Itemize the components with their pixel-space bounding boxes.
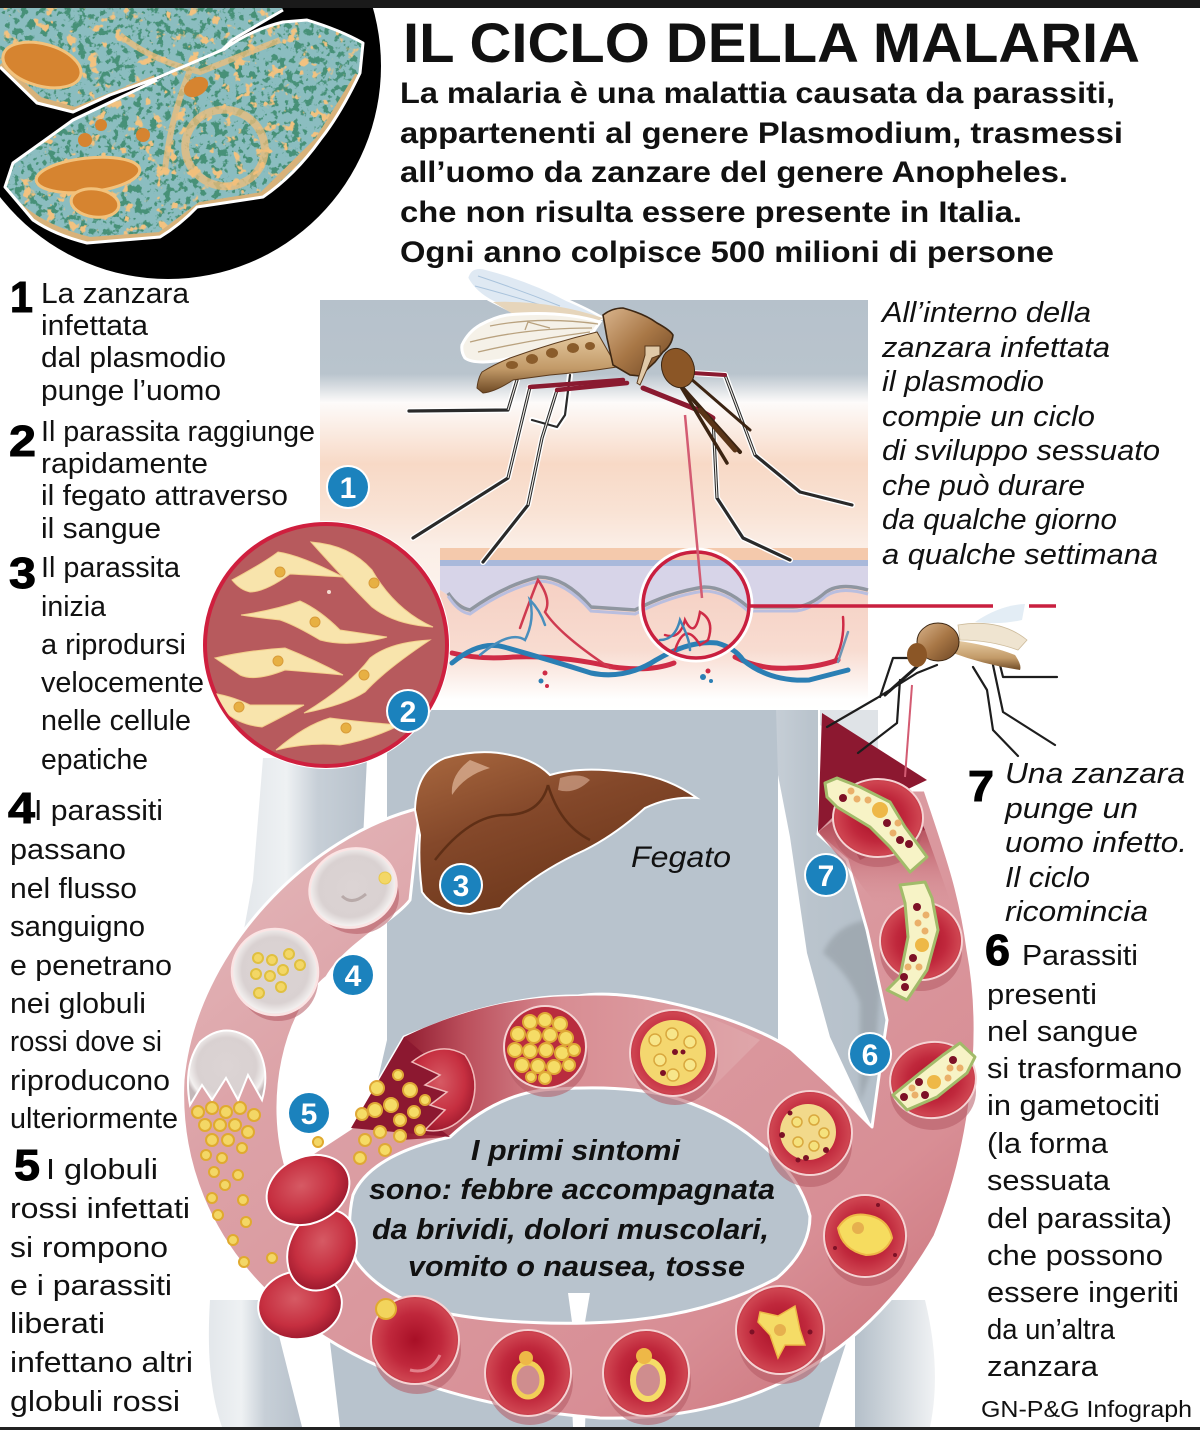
panel: liver — [415, 752, 697, 914]
step 3 text: 3 — [9, 549, 36, 598]
step 7 text: uomo infetto. — [1005, 827, 1187, 859]
large mosquito — [409, 268, 852, 598]
mosquito cycle note: zanzara infettata — [881, 332, 1110, 364]
step 5 text: rossi infettati — [10, 1193, 190, 1225]
right ring gradient blend — [818, 800, 950, 910]
cell: bursting pale — [188, 1030, 323, 1267]
cell: schizont — [630, 1010, 716, 1096]
step 4 text: ulteriormente — [10, 1103, 178, 1135]
badge 6 — [848, 1032, 892, 1076]
step 7 text — [968, 758, 1187, 928]
step 2 text: il fegato attraverso — [41, 480, 288, 512]
small mosquito legs — [827, 658, 1057, 756]
mosquito cycle note — [880, 297, 1160, 571]
cell: rupturing with merozoites — [354, 1049, 475, 1164]
plasmodium micrograph — [0, 8, 381, 279]
cell: pale with dots — [232, 929, 318, 1015]
symptom oval — [350, 1088, 810, 1323]
mosquito legs: halo — [409, 373, 852, 562]
return ring — [183, 790, 975, 1418]
top rule — [0, 0, 1200, 8]
step 4 text: nel flusso — [10, 873, 137, 905]
intro text: all’uomo da zanzare del genere Anopheles. — [400, 156, 1068, 189]
step 4 text: nei globuli — [10, 988, 146, 1020]
coxae — [637, 346, 660, 385]
gametocyte cell middle — [880, 882, 962, 1000]
step 5 text: I globuli — [46, 1154, 158, 1186]
small probe line — [905, 685, 912, 777]
step 1 text: infettata — [41, 310, 149, 342]
step 6 text: in gametociti — [987, 1090, 1160, 1122]
step 6 text — [985, 926, 1182, 1383]
small head — [907, 643, 927, 667]
step 3 text — [9, 549, 204, 776]
step 5 text: 5 — [14, 1141, 40, 1190]
band gradient near arrow — [400, 995, 760, 1140]
step 4 text: rossi dove si — [10, 1026, 162, 1058]
step 6 text: si trasformano — [987, 1053, 1182, 1085]
cell: early infection — [371, 1296, 459, 1384]
step 4 text: riproducono — [10, 1065, 170, 1097]
small abdomen — [950, 640, 1020, 670]
proboscis bundle — [680, 378, 750, 463]
wing tan upper — [493, 302, 603, 330]
gametocyte cell upper — [825, 778, 927, 872]
badge 6: 6 — [862, 1039, 878, 1072]
step 1 text: 1 — [10, 273, 33, 322]
step 4 text — [8, 784, 178, 1135]
step 7 text: Il ciclo — [1005, 862, 1090, 894]
step 1 text: dal plasmodio — [41, 342, 226, 374]
step 3 text: a riprodursi — [41, 629, 186, 661]
intro text — [400, 77, 1123, 269]
badge 1 — [326, 465, 370, 509]
sporozoite — [241, 601, 387, 643]
symptoms text: I primi sintomi — [471, 1135, 681, 1167]
step 6 text: 6 — [985, 926, 1010, 975]
badge 4 — [331, 953, 375, 997]
step 7 text: ricomincia — [1005, 896, 1148, 928]
badge 7 — [804, 853, 848, 897]
gametocyte cell lower — [885, 1036, 981, 1124]
abdominal slit — [568, 1293, 590, 1322]
step 5 text: infettano altri — [10, 1347, 193, 1379]
step 5 text: e i parassiti — [10, 1270, 172, 1302]
wing veins — [470, 320, 598, 352]
step 3 text: epatiche — [41, 744, 148, 776]
step 6 text: Parassiti — [1022, 940, 1138, 972]
step 2 text — [9, 416, 315, 545]
step 7 text: punge un — [1004, 793, 1138, 825]
badge 7: 7 — [818, 860, 834, 893]
panel: magnified parasites — [202, 521, 450, 769]
callout line and small magnifier — [640, 549, 1056, 661]
cell: trophozoite — [824, 1195, 906, 1277]
abdomen spots — [506, 342, 595, 369]
mosquito legs: dark — [409, 375, 852, 562]
step 6 text: (la forma — [987, 1128, 1109, 1160]
symptoms text: sono: febbre accompagnata — [369, 1174, 775, 1206]
wing lower — [462, 314, 600, 362]
badge 3 — [439, 863, 483, 907]
small wing tan — [958, 623, 1027, 650]
step 4 text: passano — [10, 834, 126, 866]
arrow head: upper right — [818, 713, 927, 860]
step 6 text: del parassita) — [987, 1203, 1172, 1235]
step 2 text: 2 — [9, 417, 36, 466]
sporozoite — [232, 552, 343, 592]
small mosquito — [827, 604, 1057, 777]
badge 5 — [287, 1091, 331, 1135]
badge 1: 1 — [340, 472, 356, 505]
step 5 text — [10, 1141, 193, 1418]
step 1 text: punge l’uomo — [41, 375, 221, 407]
badge 4: 4 — [345, 960, 362, 993]
mosquito cycle note: compie un ciclo — [882, 401, 1095, 433]
step 5 text: liberati — [10, 1308, 105, 1340]
step 6 text: essere ingeriti — [987, 1277, 1179, 1309]
step 2 text: Il parassita raggiunge — [41, 416, 315, 448]
intro text: Ogni anno colpisce 500 milioni di persone — [400, 236, 1054, 269]
body silhouette — [209, 708, 935, 1427]
mosquito red femurs — [530, 373, 725, 418]
mosquito cycle note: che può durare — [882, 470, 1085, 502]
cell: ring stage 1 — [485, 1330, 571, 1416]
step 5 text: globuli rossi — [10, 1386, 180, 1418]
abdomen — [477, 332, 617, 393]
credit: GN-P&G Infograph — [981, 1396, 1192, 1422]
intro text: che non risulta essere presente in Italia. — [400, 196, 1022, 229]
small thorax — [917, 623, 959, 661]
red blood cell stack — [254, 1142, 370, 1345]
symptoms text: da brividi, dolori muscolari, — [372, 1214, 769, 1246]
sporozoite — [311, 542, 433, 627]
cell: ring stage 2 — [603, 1330, 689, 1416]
step 3 text: nelle cellule — [41, 705, 191, 737]
sporozoite — [276, 718, 400, 750]
mosquito leg highlights — [508, 375, 755, 505]
step 6 text: sessuata — [987, 1165, 1111, 1197]
wing blue — [467, 268, 603, 328]
cell: early schizont — [768, 1091, 852, 1175]
mosquito cycle note: a qualche settimana — [882, 539, 1158, 571]
wing blue veins — [475, 276, 560, 308]
badge 2: 2 — [400, 696, 416, 729]
mosquito cycle note: di sviluppo sessuato — [882, 435, 1160, 467]
step 1 text: La zanzara — [41, 278, 190, 310]
badge 5: 5 — [301, 1098, 317, 1131]
blood vessels — [452, 580, 848, 688]
arrow head: lower band — [351, 1037, 470, 1137]
intro text: La malaria è una malattia causata da parassiti, — [400, 77, 1115, 110]
badge 2 — [386, 689, 430, 733]
title: IL CICLO DELLA MALARIA — [403, 11, 1140, 74]
step 4 text: sanguigno — [10, 911, 145, 943]
mosquito cycle note: All’interno della — [880, 297, 1091, 329]
step 7 text: 7 — [968, 762, 994, 811]
step 6 text: zanzara — [987, 1351, 1099, 1383]
head — [656, 344, 700, 392]
symptoms text — [369, 1135, 775, 1283]
step 6 text: presenti — [987, 979, 1097, 1011]
step 6 text: nel sangue — [987, 1016, 1138, 1048]
cell: mature schizont — [504, 1006, 586, 1088]
step 7 text: Una zanzara — [1005, 758, 1185, 790]
step 1 text — [10, 273, 226, 407]
small wing — [975, 604, 1025, 623]
panel: skin cross-section — [320, 300, 868, 710]
sporozoite — [304, 640, 430, 713]
step 6 text: da un’altra — [987, 1314, 1116, 1346]
step 3 text: Il parassita — [41, 552, 181, 584]
step 5 text: si rompono — [10, 1232, 168, 1264]
mosquito cycle note: il plasmodio — [882, 366, 1044, 398]
intro text: appartenenti al genere Plasmodium, trasmessi — [400, 117, 1123, 150]
symptoms text: vomito o nausea, tosse — [408, 1251, 745, 1283]
sporozoite — [215, 648, 343, 678]
step 6 text: che possono — [987, 1240, 1163, 1272]
step 3 text: velocemente — [41, 667, 204, 699]
step 4 text: I parassiti — [34, 795, 163, 827]
mosquito cycle note: da qualche giorno — [882, 504, 1117, 536]
step 2 text: rapidamente — [41, 448, 208, 480]
probe line — [685, 415, 702, 598]
cell: pale with parasite — [298, 836, 408, 940]
cell shadows — [238, 789, 976, 1425]
cell: amoeboid stage — [736, 1286, 824, 1374]
step 4 text: 4 — [8, 784, 36, 833]
step 2 text: il sangue — [41, 513, 161, 545]
step 4 text: e penetrano — [10, 950, 172, 982]
sporozoite — [216, 693, 304, 728]
released parasites — [192, 1102, 323, 1267]
bottom rule — [0, 1427, 1200, 1430]
Fegato label: Fegato — [631, 841, 731, 874]
badge 3: 3 — [453, 870, 469, 903]
thorax — [603, 308, 673, 376]
step 3 text: inizia — [41, 591, 107, 623]
